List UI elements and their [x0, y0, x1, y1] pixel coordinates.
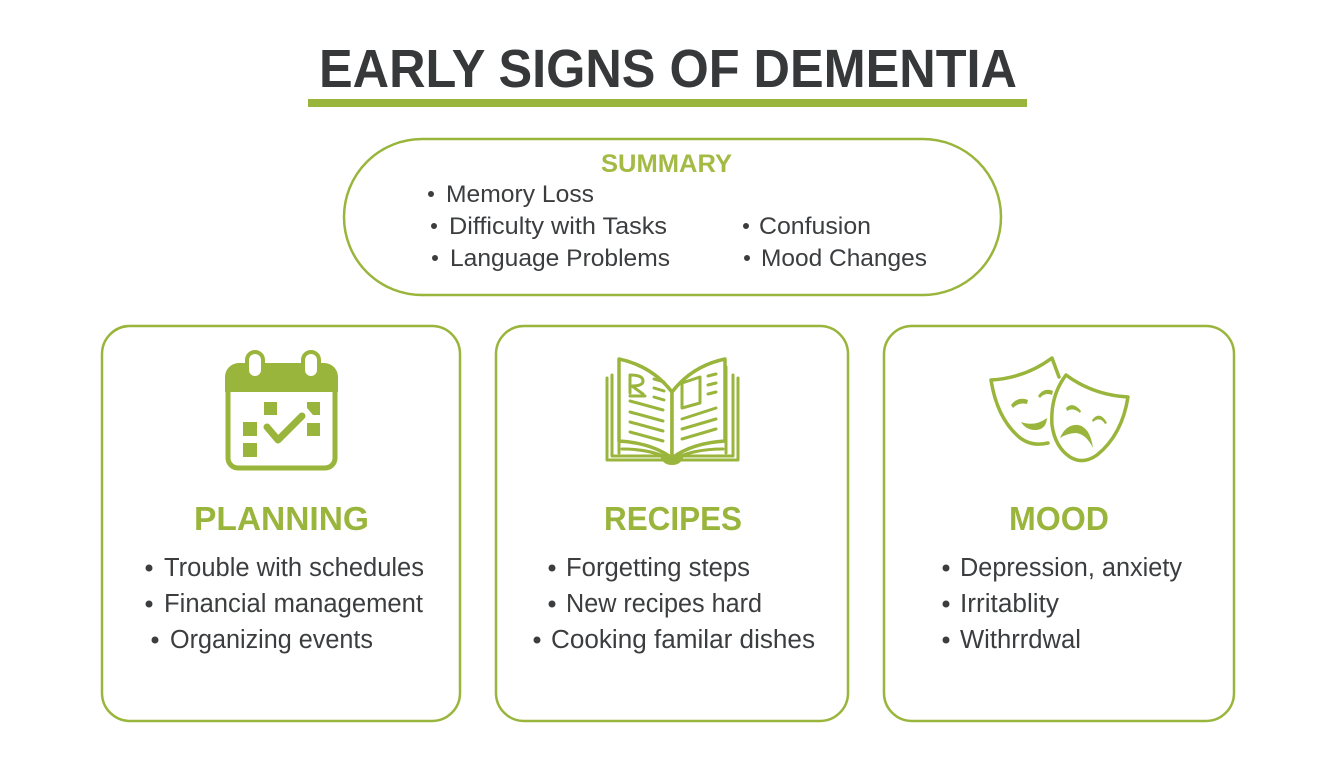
- panel: mood: [884, 326, 1234, 721]
- planning list: Financial management: [164, 590, 423, 618]
- recipes list: Cooking familar dishes: [551, 626, 815, 654]
- mood list: [942, 554, 1182, 654]
- summary list: Confusion: [759, 213, 871, 240]
- recipes list: [534, 554, 815, 654]
- icon: theatre masks: [991, 358, 1128, 461]
- icon: open book: [607, 359, 738, 465]
- summary list: Memory Loss: [446, 181, 594, 208]
- icon: calendar: [225, 352, 338, 468]
- planning list: Trouble with schedules: [164, 554, 424, 582]
- recipes list: New recipes hard: [566, 590, 762, 618]
- planning heading: PLANNING: [194, 500, 369, 537]
- panel: summary: [344, 139, 1001, 295]
- summary heading: SUMMARY: [601, 150, 732, 178]
- recipes heading: RECIPES: [604, 500, 742, 537]
- summary list: Difficulty with Tasks: [449, 213, 667, 240]
- planning list: [146, 554, 424, 654]
- summary list: [428, 181, 927, 272]
- summary list: Language Problems: [450, 245, 670, 272]
- mood list: Irritablity: [960, 590, 1059, 618]
- mood list: Depression, anxiety: [960, 554, 1182, 582]
- recipes list: Forgetting steps: [566, 554, 750, 582]
- mood list: Withrrdwal: [960, 626, 1081, 654]
- summary list: Mood Changes: [761, 245, 927, 272]
- title: EARLY SIGNS OF DEMENTIA: [319, 39, 1017, 99]
- panel: planning: [102, 326, 460, 721]
- panel: recipes: [496, 326, 848, 721]
- planning list: Organizing events: [170, 626, 373, 654]
- title underline: [308, 99, 1027, 107]
- mood heading: MOOD: [1009, 500, 1109, 537]
